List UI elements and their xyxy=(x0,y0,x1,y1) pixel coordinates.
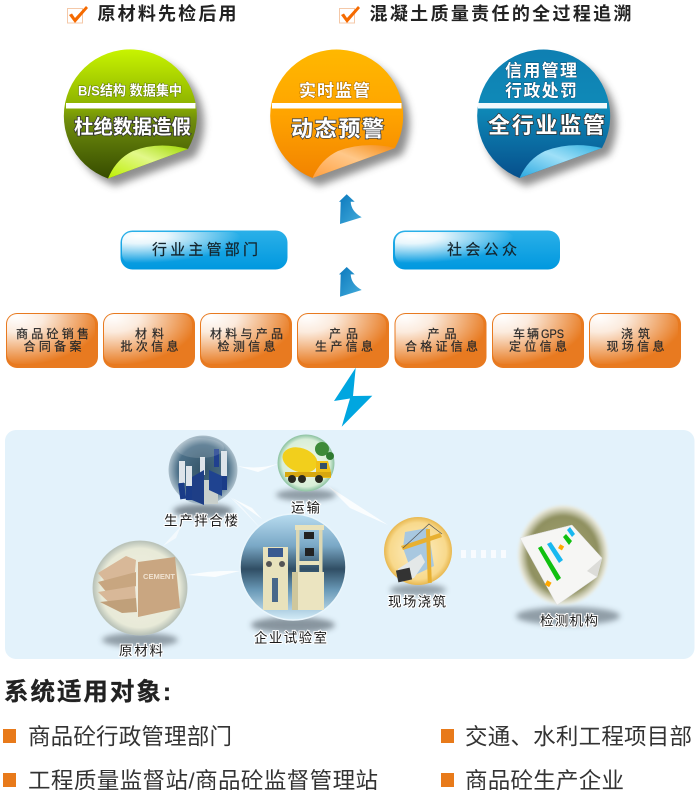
info box: 产品合格证信息 xyxy=(394,313,486,368)
info box: 产品生产信息: 生产信息 xyxy=(315,338,373,354)
badge: 全行业监管: 全行业监管 xyxy=(488,113,605,138)
node: 企业试验室: 企业试验室 xyxy=(254,630,327,646)
info box: 材料与产品检测信息: 检测信息 xyxy=(218,338,276,354)
info box: 产品合格证信息: 合格证信息 xyxy=(405,338,478,354)
info box: 材料与产品检测信息: 材料与产品 xyxy=(210,327,283,341)
badge: 动态预警: 实时监管 xyxy=(299,80,370,100)
dashed connector xyxy=(461,550,506,558)
info box: 材料批次信息: 材料 xyxy=(135,327,164,341)
list item: 交通、水利工程项目部: 交通、水利工程项目部 xyxy=(465,724,692,750)
flow arrows xyxy=(163,463,388,577)
button: 行业主管部门 xyxy=(120,230,288,270)
info box: 商品砼销售合同备案: 合同备案 xyxy=(24,338,82,354)
check item: 混凝土质量责任的全过程追溯: 混凝土质量责任的全过程追溯 xyxy=(370,3,632,24)
info box: 材料批次信息 xyxy=(103,313,195,368)
info box: 车辆GPS定位信息: GPS xyxy=(541,329,564,341)
node: 运输 xyxy=(276,434,336,516)
badge: 杜绝数据造假 xyxy=(64,49,204,186)
arrow: up to departments xyxy=(339,267,362,297)
info box: 产品生产信息 xyxy=(297,313,389,368)
info box: 产品合格证信息: 产品 xyxy=(428,327,456,341)
button: 社会公众: 社会公众 xyxy=(447,242,517,258)
info box: 车辆GPS定位信息: 车辆 xyxy=(513,326,541,341)
badge: 杜绝数据造假: 杜绝数据造假 xyxy=(74,116,191,138)
arrow: up to badges xyxy=(339,194,362,224)
badge: 杜绝数据造假: B/S结构 数据集中 xyxy=(78,82,182,98)
node: 运输: 运输 xyxy=(291,500,320,516)
check item: 原材料先检后用: 原材料先检后用 xyxy=(98,3,236,24)
heading: 系统适用对象: 系统适用对象: xyxy=(4,678,171,706)
node: 原材料: CEMENT xyxy=(143,574,176,581)
badge: 动态预警: 动态预警 xyxy=(291,116,384,142)
node: 生产拌合楼: 生产拌合楼 xyxy=(164,514,238,528)
node: 企业试验室 xyxy=(240,514,346,646)
info box: 浇筑现场信息: 浇筑 xyxy=(621,326,650,341)
button: 社会公众 xyxy=(393,230,560,270)
info box: 产品生产信息: 产品 xyxy=(329,327,358,341)
button: 行业主管部门: 行业主管部门 xyxy=(152,242,258,258)
badge: 全行业监管: 行政处罚 xyxy=(505,82,577,100)
node: 原材料 xyxy=(92,540,188,658)
info box: 材料批次信息: 批次信息 xyxy=(120,338,178,354)
node: 检测机构 xyxy=(516,503,620,628)
badge: 全行业监管 xyxy=(477,50,617,186)
info box: 浇筑现场信息 xyxy=(589,313,681,368)
list item: 商品砼行政管理部门: 商品砼行政管理部门 xyxy=(28,724,232,750)
badge: 全行业监管: 信用管理 xyxy=(505,60,577,80)
info box: 车辆GPS定位信息: 定位信息 xyxy=(509,338,567,354)
node: 生产拌合楼 xyxy=(164,436,238,528)
node: 检测机构: 检测机构 xyxy=(540,614,598,628)
node: 原材料: 原材料 xyxy=(119,644,164,658)
icon: lightning bolt xyxy=(334,368,372,427)
info box: 浇筑现场信息: 现场信息 xyxy=(606,338,664,354)
panel: process flow xyxy=(5,430,694,659)
node: 现场浇筑: 现场浇筑 xyxy=(388,594,446,610)
info box: 材料与产品检测信息 xyxy=(200,313,292,368)
node: 现场浇筑 xyxy=(384,517,452,610)
info box: 车辆GPS定位信息 xyxy=(492,313,584,368)
badge: 动态预警 xyxy=(270,50,410,186)
info box: 商品砼销售合同备案: 商品砼销售 xyxy=(16,326,89,341)
info box: 商品砼销售合同备案 xyxy=(6,313,98,368)
